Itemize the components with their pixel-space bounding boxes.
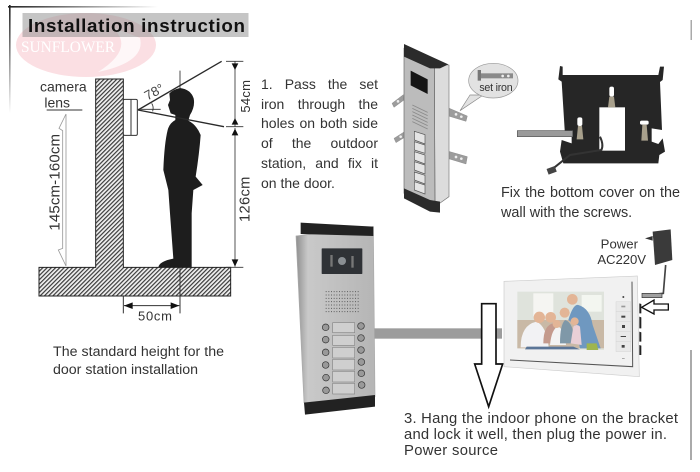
step 3 text: and lock it well, then plug the power in. [404,427,667,443]
camera panel [411,71,428,94]
camera window [322,248,362,274]
caption: standard height: door station installation [53,362,198,378]
set iron callout [460,63,518,111]
connecting bar [373,328,502,339]
corner rule [8,5,158,113]
cover cutouts [577,87,649,151]
call button rows [333,323,355,394]
caption: standard height [53,344,224,378]
step 2 text [501,185,680,220]
power arrow [642,300,668,314]
camera lens label: camera [40,79,87,95]
angle label: 78° [142,81,167,103]
wall bar [517,131,573,137]
step 3 text: 3. Hang the indoor phone on the bracket [404,411,678,427]
ribbon cable and plug [547,137,602,175]
outdoor station front [296,223,375,415]
wall and floor [39,79,231,296]
speaker grille [326,292,360,312]
sight lines [138,61,224,127]
title: Installation instruction [28,15,245,36]
step 1 text: 1. Pass the set [261,76,378,92]
call buttons [414,131,425,194]
dimension 54cm [226,61,253,127]
step 3 text [404,411,678,459]
dimension 50cm [123,267,180,324]
caption: standard height: The standard height for the [53,344,224,360]
power label: AC220V [597,252,646,267]
dimension 54cm: 54cm [238,80,253,113]
speaker slots [412,105,428,129]
wiring scene [296,223,672,415]
door station side view [123,99,137,135]
step 1 text: on the door. [261,175,335,191]
step 2 text: wall with the screws. [501,204,632,220]
dimension 145cm-160cm: 145cm-160cm [46,134,63,231]
power label [597,237,646,267]
indoor monitor [504,276,641,377]
logo watermark [16,13,156,77]
set iron callout: set iron [479,82,513,94]
person silhouette [158,88,203,267]
camera lens label [40,79,87,110]
station body [434,63,449,207]
power label: Power [601,237,639,252]
camera lens label: lens [44,94,70,110]
outdoor station with set iron [392,44,518,213]
set iron brackets [392,95,467,164]
dimension 126cm [226,128,254,267]
logo watermark: SUNFLOWER [21,39,115,56]
step 1 text: station, and fix it [261,155,378,171]
step 1 text: holes on both side [261,115,378,131]
dimension 50cm: 50cm [138,309,172,324]
step 1 text: iron through the [261,96,378,112]
down arrow [475,304,503,407]
family photo on screen [517,292,604,350]
step 1 text [261,76,378,191]
step 3 text: Power source [404,443,498,459]
bottom cover plate [558,66,665,163]
bracket [517,66,665,175]
height diagram [39,61,254,324]
power adapter [642,229,672,298]
dimension 145cm-160cm [46,110,82,266]
monitor buttons [616,302,631,352]
step 1 text: of the outdoor [261,135,378,151]
right edge rules [690,20,692,460]
dimension 126cm: 126cm [238,177,254,222]
step 2 text: Fix the bottom cover on the [501,185,680,201]
